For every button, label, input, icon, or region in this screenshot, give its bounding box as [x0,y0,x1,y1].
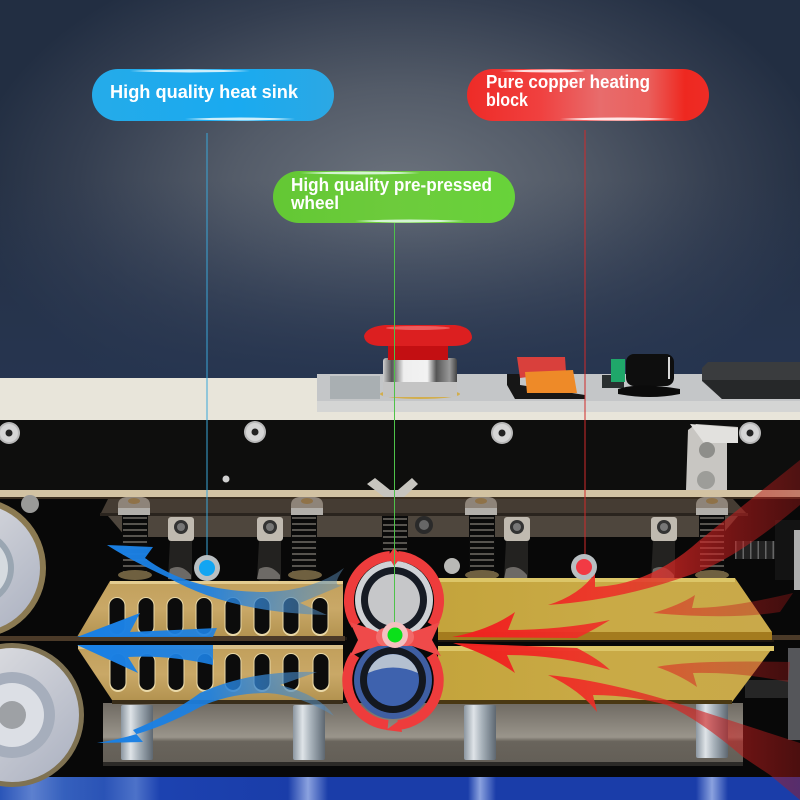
label: copper heating block [467,69,709,121]
label: heat sink [92,69,334,121]
red heat flow arrows [452,460,800,800]
leader line: pre-pressed wheel [382,222,408,648]
machine body [0,378,800,800]
cream top strip [0,378,800,421]
label: pre-pressed wheel: wheel [290,192,339,213]
leader line: copper block [571,130,597,580]
springs, bolts and clips [118,497,729,583]
wing nut [367,478,418,497]
pillars [121,703,728,760]
upper bracket [21,495,748,537]
emergency stop button [364,325,472,399]
red rotation arrows [347,548,441,732]
rocker switch [507,357,585,399]
right side gear and rod [735,520,800,740]
control panel [317,325,800,412]
label: copper heating block: Pure copper heating [486,71,650,92]
pre-pressed wheels [347,548,441,732]
lower base plate [103,703,743,766]
side pressure wheels [0,498,84,787]
label: pre-pressed wheel: High quality pre-pressed [291,174,492,195]
label: copper heating block: block [486,89,529,110]
blue base [0,777,800,800]
green light and knob [602,354,680,397]
plate screws and bracket [0,421,761,497]
copper heating block [438,578,800,704]
leader line: heat sink [194,133,220,581]
display box [702,362,800,399]
blue airflow arrows [77,545,344,743]
tan edge strip [0,490,800,497]
heat sink [0,581,347,704]
lower dark cavity [0,497,800,779]
label: heat sink: High quality heat sink [110,81,299,102]
black front plate [0,420,800,490]
label: pre-pressed wheel [273,171,515,223]
